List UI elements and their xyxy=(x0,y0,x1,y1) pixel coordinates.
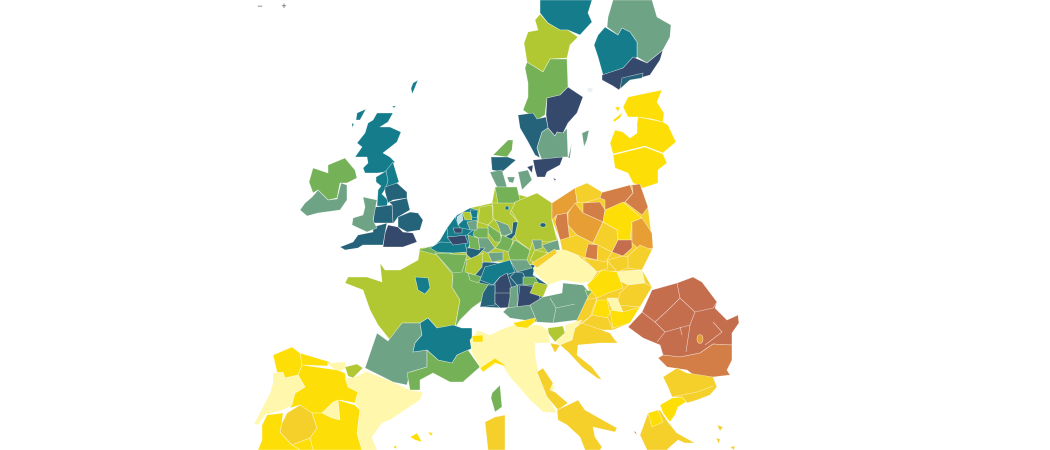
region group: Croatia xyxy=(550,323,618,380)
region group: France xyxy=(345,246,502,412)
region group: Finland xyxy=(587,0,671,92)
region group: Sweden xyxy=(518,0,592,181)
region group: United Kingdom xyxy=(340,80,423,250)
region group: Czechia, Slovakia and Hungary xyxy=(532,249,652,330)
zoom controls: − xyxy=(257,1,263,11)
region group: Baltic states xyxy=(610,90,676,188)
region group: Ireland xyxy=(300,158,357,216)
region group: Germany and Benelux xyxy=(430,187,560,312)
region group: Bulgaria and Greece xyxy=(633,368,735,450)
region group: Italy xyxy=(470,318,617,450)
zoom controls: + xyxy=(281,1,287,11)
zoom controls xyxy=(257,1,287,11)
region group: Romania xyxy=(628,277,739,380)
region group: Denmark xyxy=(490,140,533,190)
region group: Iberia xyxy=(254,347,433,450)
land underlay for central Europe xyxy=(430,183,653,330)
region group: Poland xyxy=(552,183,653,272)
region group: Austria and Slovenia xyxy=(503,283,592,345)
